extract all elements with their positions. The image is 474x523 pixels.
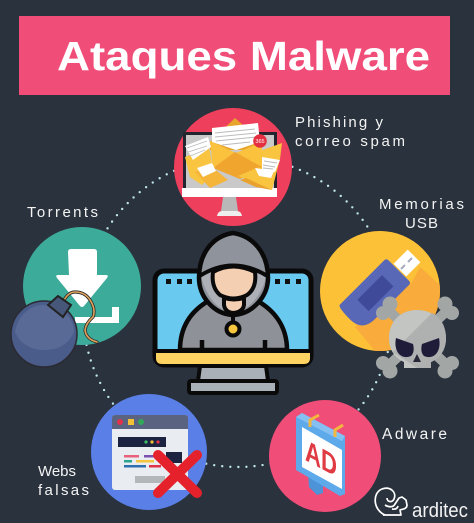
logo: arditec xyxy=(375,488,468,522)
icon: AD sign: AD xyxy=(305,433,337,484)
main envelope xyxy=(210,118,262,150)
label: Webs falsas: Webs xyxy=(38,463,76,480)
label: Torrents: Torrents xyxy=(27,204,98,221)
label: Phishing y correo spam: correo spam xyxy=(295,133,405,150)
label: Webs falsas: falsas xyxy=(38,482,89,499)
label: Phishing y correo spam: Phishing y xyxy=(295,114,384,131)
icon: AD sign xyxy=(269,400,381,512)
logo: arditec: arditec xyxy=(412,500,468,522)
label: Memorias USB xyxy=(379,196,464,232)
label: Adware: Adware xyxy=(382,426,447,443)
title: Ataques Malware xyxy=(57,33,430,79)
icon: USB with skull xyxy=(320,231,460,378)
icon: download with bomb xyxy=(11,227,141,367)
icon: phishing emails on monitor xyxy=(174,108,292,226)
icon: fake website with red X xyxy=(91,394,207,510)
icon: hacker at monitor xyxy=(155,233,311,393)
skull and crossbones xyxy=(376,296,459,378)
label: Webs falsas xyxy=(38,463,89,499)
title banner xyxy=(19,16,450,95)
lower right envelope xyxy=(238,167,272,190)
left envelope xyxy=(185,148,214,185)
label: Memorias USB: Memorias xyxy=(379,196,464,213)
label: Phishing y correo spam xyxy=(295,114,405,150)
right back envelope xyxy=(257,143,282,190)
label: Memorias USB: USB xyxy=(405,215,438,232)
badge: 365: 365 xyxy=(255,139,265,145)
